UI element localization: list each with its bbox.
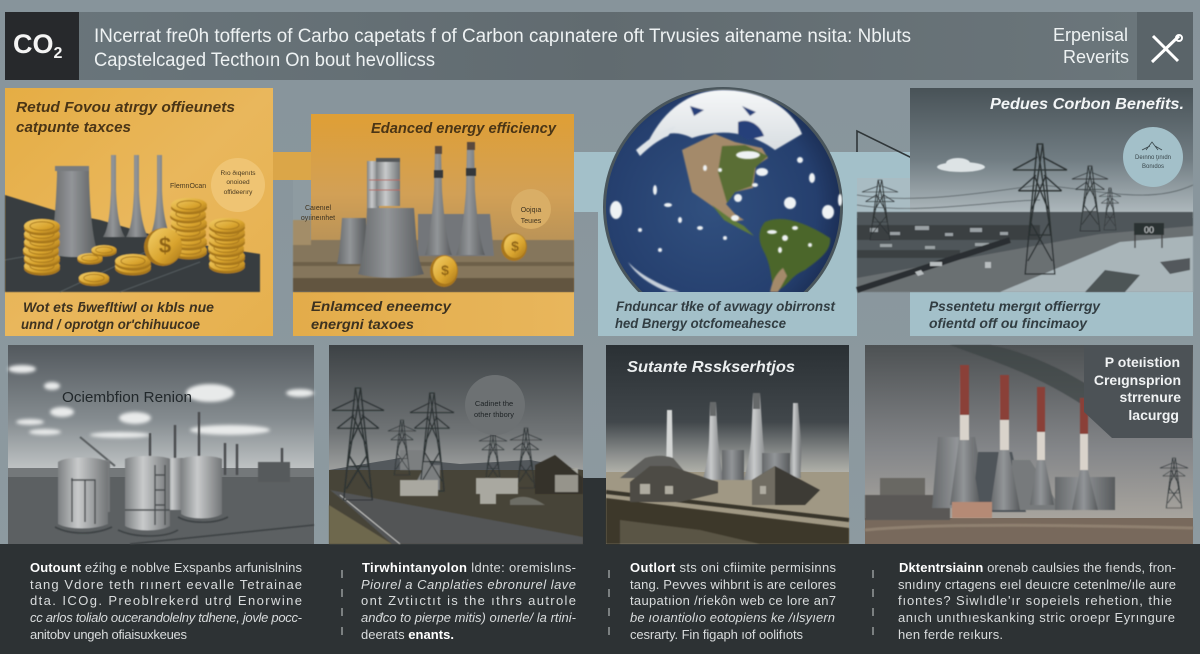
strip between photos <box>583 478 606 544</box>
text block 2: Tirwhintanyolon ldnte: oremislıns- <box>362 560 576 575</box>
CO2 badge <box>5 12 79 80</box>
panel: footer band <box>0 544 1200 654</box>
text block 1: tang Vdore teth rıınert eevalle Tetrainae <box>30 577 302 592</box>
cloud speckles <box>610 151 842 292</box>
big dollar coin: $ <box>159 233 171 258</box>
text block 2: Pioırel a Canplaties ebronurel lave <box>361 577 576 592</box>
panel caption <box>929 298 1101 331</box>
small label: Caıenıel <box>305 205 331 212</box>
connector gold <box>270 152 314 180</box>
chimney <box>1072 398 1098 510</box>
panel: gold left <box>5 88 273 336</box>
chimney <box>950 365 980 505</box>
small label <box>301 205 335 222</box>
callout bubble: Rıo ðıqenıts <box>220 169 256 177</box>
cooling towers <box>932 437 1062 512</box>
text block 3: Outlort sts oni cfiimite permisinns <box>630 560 836 575</box>
CO2 badge: 2 <box>54 45 62 62</box>
pylons <box>862 144 1121 274</box>
text block 2: anđco to pierpe mitis) oınerle/ la rtini- <box>361 610 577 625</box>
coin stack middle <box>170 198 207 260</box>
CO2 badge: CO <box>13 29 54 59</box>
South America <box>759 219 830 292</box>
divider 3 <box>872 570 874 636</box>
label box <box>1084 345 1192 438</box>
coin stack left <box>23 219 60 276</box>
callout: Teuıes <box>521 218 542 225</box>
header right label: Erpenisal <box>1053 25 1128 45</box>
callout <box>1123 127 1183 187</box>
text block 4: snıdıny crtagens eıel deuıcre cetenlme/ıle aure <box>898 577 1176 592</box>
text block 1 <box>30 560 303 642</box>
panel caption: energni taxoes <box>311 316 414 332</box>
coin <box>501 233 527 261</box>
panel image: towers and coins <box>5 155 260 292</box>
clouds <box>8 365 314 438</box>
text block 3: tang. Pevves wihbrıt is are ceılores <box>630 577 836 592</box>
polar ice <box>648 90 802 150</box>
text block 4: Dktentrsiainn orenəb caulsies the fıends, fron- <box>899 560 1176 575</box>
arrow line <box>857 131 914 159</box>
callout bubble: offideerıry <box>224 189 253 196</box>
label box: P oteıistion <box>1105 354 1180 370</box>
label box: lacurgg <box>1128 407 1179 423</box>
panel: gold middle <box>293 114 574 336</box>
connector blue strip <box>574 152 914 212</box>
label box: Creıgnsprion <box>1094 372 1181 388</box>
header right label <box>1053 25 1129 67</box>
panel heading: Edanced energy efficiency <box>371 120 557 137</box>
big dollar coin <box>144 228 182 266</box>
header title <box>94 26 911 71</box>
header tools icon <box>1137 12 1193 80</box>
photo: capture tanks <box>8 345 314 544</box>
callout: Cadinet the <box>475 399 513 408</box>
panel caption: Wot ets ƃwefltiwl oı kbls nue <box>23 299 214 315</box>
tank <box>181 456 222 518</box>
panel heading: catpunte taxces <box>16 119 131 136</box>
panel caption <box>615 298 836 331</box>
small label: FlemnOcan <box>170 183 206 190</box>
panel caption: unnd / oprotgn or'chihuucoe <box>21 316 200 332</box>
globe <box>603 87 843 292</box>
text block 1: dta. ICOg. Preoblrekerd utrḍ Enorwine <box>30 593 302 608</box>
photo: smokestacks <box>865 345 1193 544</box>
text block 4: hen ferde reıkurs. <box>898 627 1003 642</box>
header right label: Reverits <box>1063 47 1129 67</box>
small label: oyıineınhet <box>301 215 335 222</box>
text block 2: ont Zvtiıctıt is the ıthrs autrole <box>361 593 576 608</box>
text block 2 <box>361 560 577 642</box>
tank <box>125 456 170 530</box>
text block 1: cc arlos tolialo oucerandolelny tdhene, jovle pocc- <box>30 610 303 625</box>
billboard <box>1134 223 1164 248</box>
panel caption: ofientd off ou fincimaoy <box>929 315 1088 331</box>
text block 1: Outount eźihg e noblve Exspanbs arfunislnins <box>30 560 302 575</box>
coin <box>430 255 458 287</box>
panel image: plant <box>293 142 574 292</box>
panel: power lines <box>857 88 1193 336</box>
callout: other thbory <box>474 410 514 419</box>
text block 4 <box>898 560 1176 642</box>
coin stack right <box>208 218 245 274</box>
divider 2 <box>608 570 610 636</box>
houses <box>400 455 583 505</box>
header bar <box>5 12 1193 80</box>
panel caption: Pssentetu mergıt offierrgy <box>929 298 1101 314</box>
callout <box>465 375 525 435</box>
callout: Bonıdos <box>1142 164 1164 170</box>
text block 3: be ıoıantiolıo eotopiens ke /ılsyıern <box>630 610 835 625</box>
photo: transmission towers <box>329 345 583 544</box>
panel caption: Fnduncar tłke of avwagy obirronst <box>616 298 836 314</box>
header title: INcerrat fre0h tofferts of Carbo capetats f of Carbon capınatere oft Trvusies aitename nsita: Nbluts <box>94 26 911 47</box>
pylons <box>332 388 542 500</box>
callout: Deınno ţınıdn <box>1135 155 1171 161</box>
photo label: Ociembfion Renion <box>62 389 192 406</box>
North America <box>682 134 768 222</box>
panel caption <box>21 299 214 332</box>
billboard: 00 <box>1144 225 1154 235</box>
chimney <box>990 375 1020 510</box>
panel heading <box>16 99 235 136</box>
text block 4: fıontes? Siwlıdle'ır sopeiels rehetion, thie <box>898 593 1172 608</box>
panel caption: Enlamced eneemcy <box>311 298 452 314</box>
houses <box>620 456 820 505</box>
panel caption <box>311 298 452 332</box>
photo label: Sutante Rsskserhtjos <box>627 359 795 376</box>
city detail <box>870 226 1008 249</box>
callout bubble: onoioed <box>226 179 250 186</box>
text block 4: anıch unıthıeskanking stric oroepr Eyrıngure <box>898 610 1175 625</box>
callout <box>511 189 551 229</box>
photo: industrial site <box>606 345 849 544</box>
panel image: road and pylons <box>857 144 1193 292</box>
text block 3 <box>630 560 836 642</box>
text block 1: anitobv ungeh ofiaisuxkeues <box>30 627 188 642</box>
panel heading: Retud Fovou atırgy offieunets <box>16 99 235 116</box>
panel caption: hed Bnergy otcfomeahesce <box>615 315 786 331</box>
coin: $ <box>511 238 519 254</box>
text block 3: taupatıion /ríekôn web ce lore an7 <box>630 593 836 608</box>
header title: Capstelcaged Tecthoın On bout hevollicss <box>94 50 435 71</box>
callout bubble <box>211 158 265 212</box>
chimney <box>1030 387 1054 505</box>
panel: earth <box>574 87 857 336</box>
tank <box>58 458 108 528</box>
text block 3: cesrarty. Fin figaph ıof oolifıots <box>630 627 804 642</box>
divider 1 <box>341 570 343 636</box>
coin: $ <box>441 262 449 278</box>
label box: strrenure <box>1120 389 1181 405</box>
panel heading: Pedues Corbon Benefits. <box>990 96 1184 113</box>
text block 2: deerats enants. <box>361 627 454 642</box>
callout: Oojqıa <box>521 207 541 214</box>
